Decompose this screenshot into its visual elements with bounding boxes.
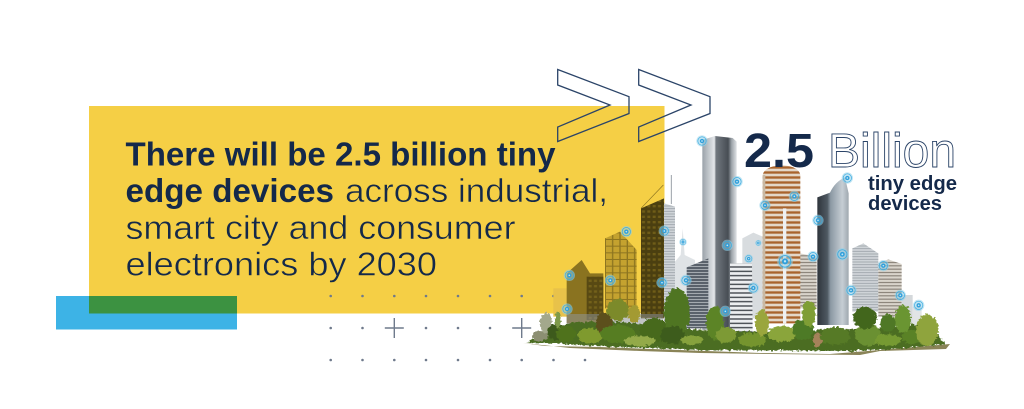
headline text: smart city and consumer [126,210,516,247]
yellow text panel [89,106,664,314]
curved blue-grey tower [817,177,849,325]
blue accent bar [56,296,237,330]
background pale towers [675,228,817,318]
headline text [126,136,608,284]
stat: 2.5: 2.5 [744,125,814,178]
buildings over yellow panel [553,175,675,326]
connected device icons [561,135,924,317]
headline text: There will be 2.5 billion tiny [126,136,556,174]
headline text: edge devices [126,173,334,210]
headline text: electronics by 2030 [126,246,437,284]
trees and foliage [527,288,945,351]
stat caption [868,173,957,215]
dot grid with plus marks [329,295,586,361]
outlined double chevron arrows [558,70,710,142]
orange striped tower [763,165,800,323]
main grey tower [702,136,737,330]
ground and soil [523,343,950,355]
green overlap of accent bar [89,296,237,314]
stat caption: devices [868,193,942,215]
city illustration [523,135,950,355]
low white building [730,263,753,333]
stat: Billion outlined: Billion [828,125,956,178]
stat caption: tiny edge [868,173,957,195]
low dark building [687,258,708,328]
right side buildings [852,243,922,327]
headline text: across industrial, [345,173,608,210]
